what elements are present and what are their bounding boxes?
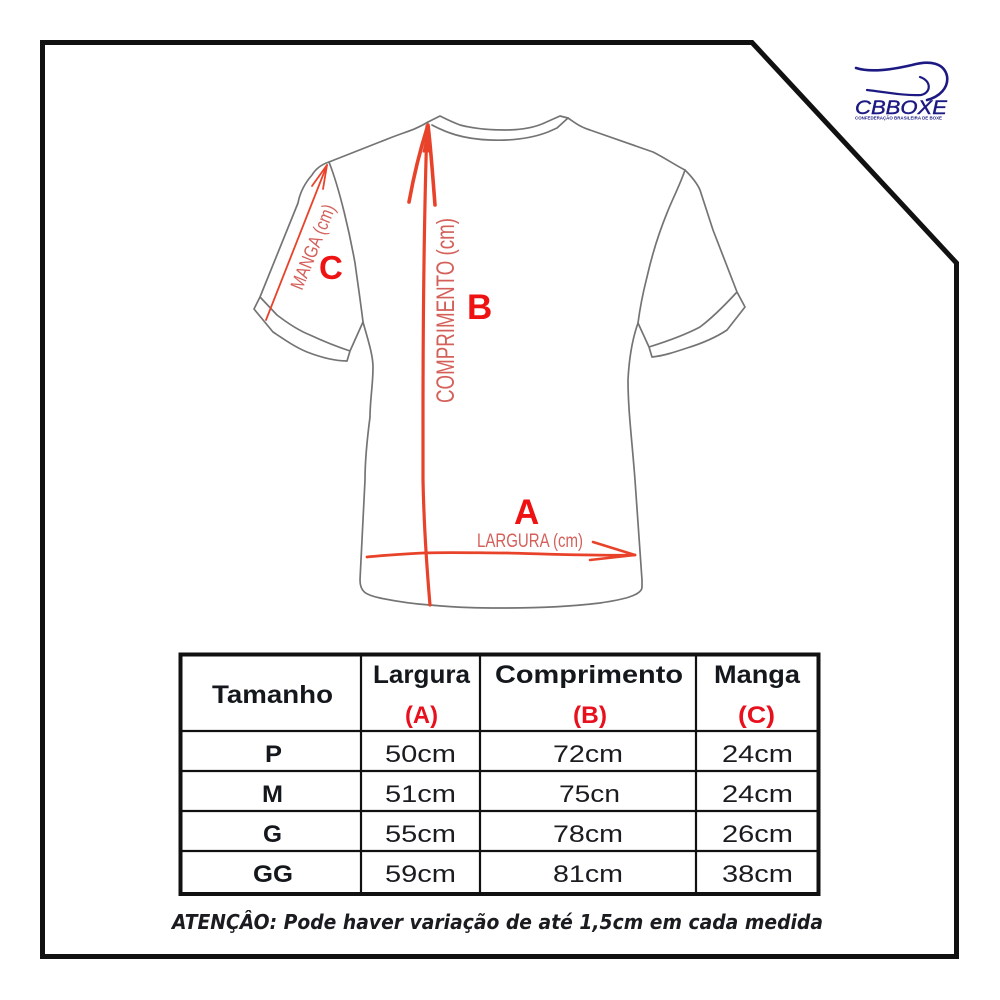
attention note: ATENÇÂO: Pode haver variação de até 1,5cm em cada medida: [170, 910, 823, 934]
row GG: 59cm: [385, 861, 456, 888]
row M: 75cn: [559, 781, 620, 808]
row G: [263, 821, 793, 848]
shirt body and shoulders: [329, 118, 685, 608]
logo subtitle: CONFEDERAÇÃO BRASILEIRA DE BOXE: [855, 114, 942, 120]
row M: 24cm: [722, 781, 793, 808]
row G: 26cm: [722, 821, 793, 848]
row P: 50cm: [385, 741, 456, 768]
row P: P: [265, 741, 282, 768]
header row: (A): [405, 702, 438, 729]
arrow A: largura: [367, 542, 635, 560]
left sleeve: [254, 162, 363, 361]
header row: Largura: [373, 661, 471, 689]
size table: [180, 654, 818, 894]
header row: [212, 661, 801, 729]
arrow B: comprimento: [409, 125, 435, 605]
label: comprimento (cm): COMPRIMENTO (cm): [432, 218, 460, 403]
logo wordmark: CBBOXE: [855, 98, 947, 119]
table grid: [180, 654, 818, 894]
logo: CBBOXE: [855, 63, 947, 120]
collar: [428, 116, 568, 140]
row GG: 38cm: [722, 861, 793, 888]
header row: Comprimento: [495, 661, 683, 689]
arrow C: manga: [266, 165, 327, 320]
t-shirt outline: [254, 116, 745, 608]
row GG: 81cm: [553, 861, 623, 888]
row M: [262, 781, 793, 808]
row M: 51cm: [385, 781, 456, 808]
row GG: GG: [253, 861, 293, 888]
header row: (C): [738, 702, 775, 729]
label: largura (cm): LARGURA (cm): [477, 531, 583, 552]
letter C: C: [319, 249, 343, 286]
header row: Tamanho: [212, 681, 333, 709]
row P: 72cm: [553, 741, 623, 768]
row P: 24cm: [722, 741, 793, 768]
logo swoosh: [856, 63, 947, 100]
row G: 78cm: [553, 821, 623, 848]
header row: (B): [573, 702, 607, 729]
row G: 55cm: [385, 821, 456, 848]
row G: G: [263, 821, 282, 848]
row P: [265, 741, 793, 768]
letter B: B: [467, 288, 492, 327]
row M: M: [262, 781, 283, 808]
letter A: A: [514, 493, 539, 532]
row GG: [253, 861, 793, 888]
header row: Manga: [714, 661, 801, 689]
label: manga (cm): MANGA (cm): [287, 202, 340, 293]
right sleeve: [638, 170, 745, 357]
